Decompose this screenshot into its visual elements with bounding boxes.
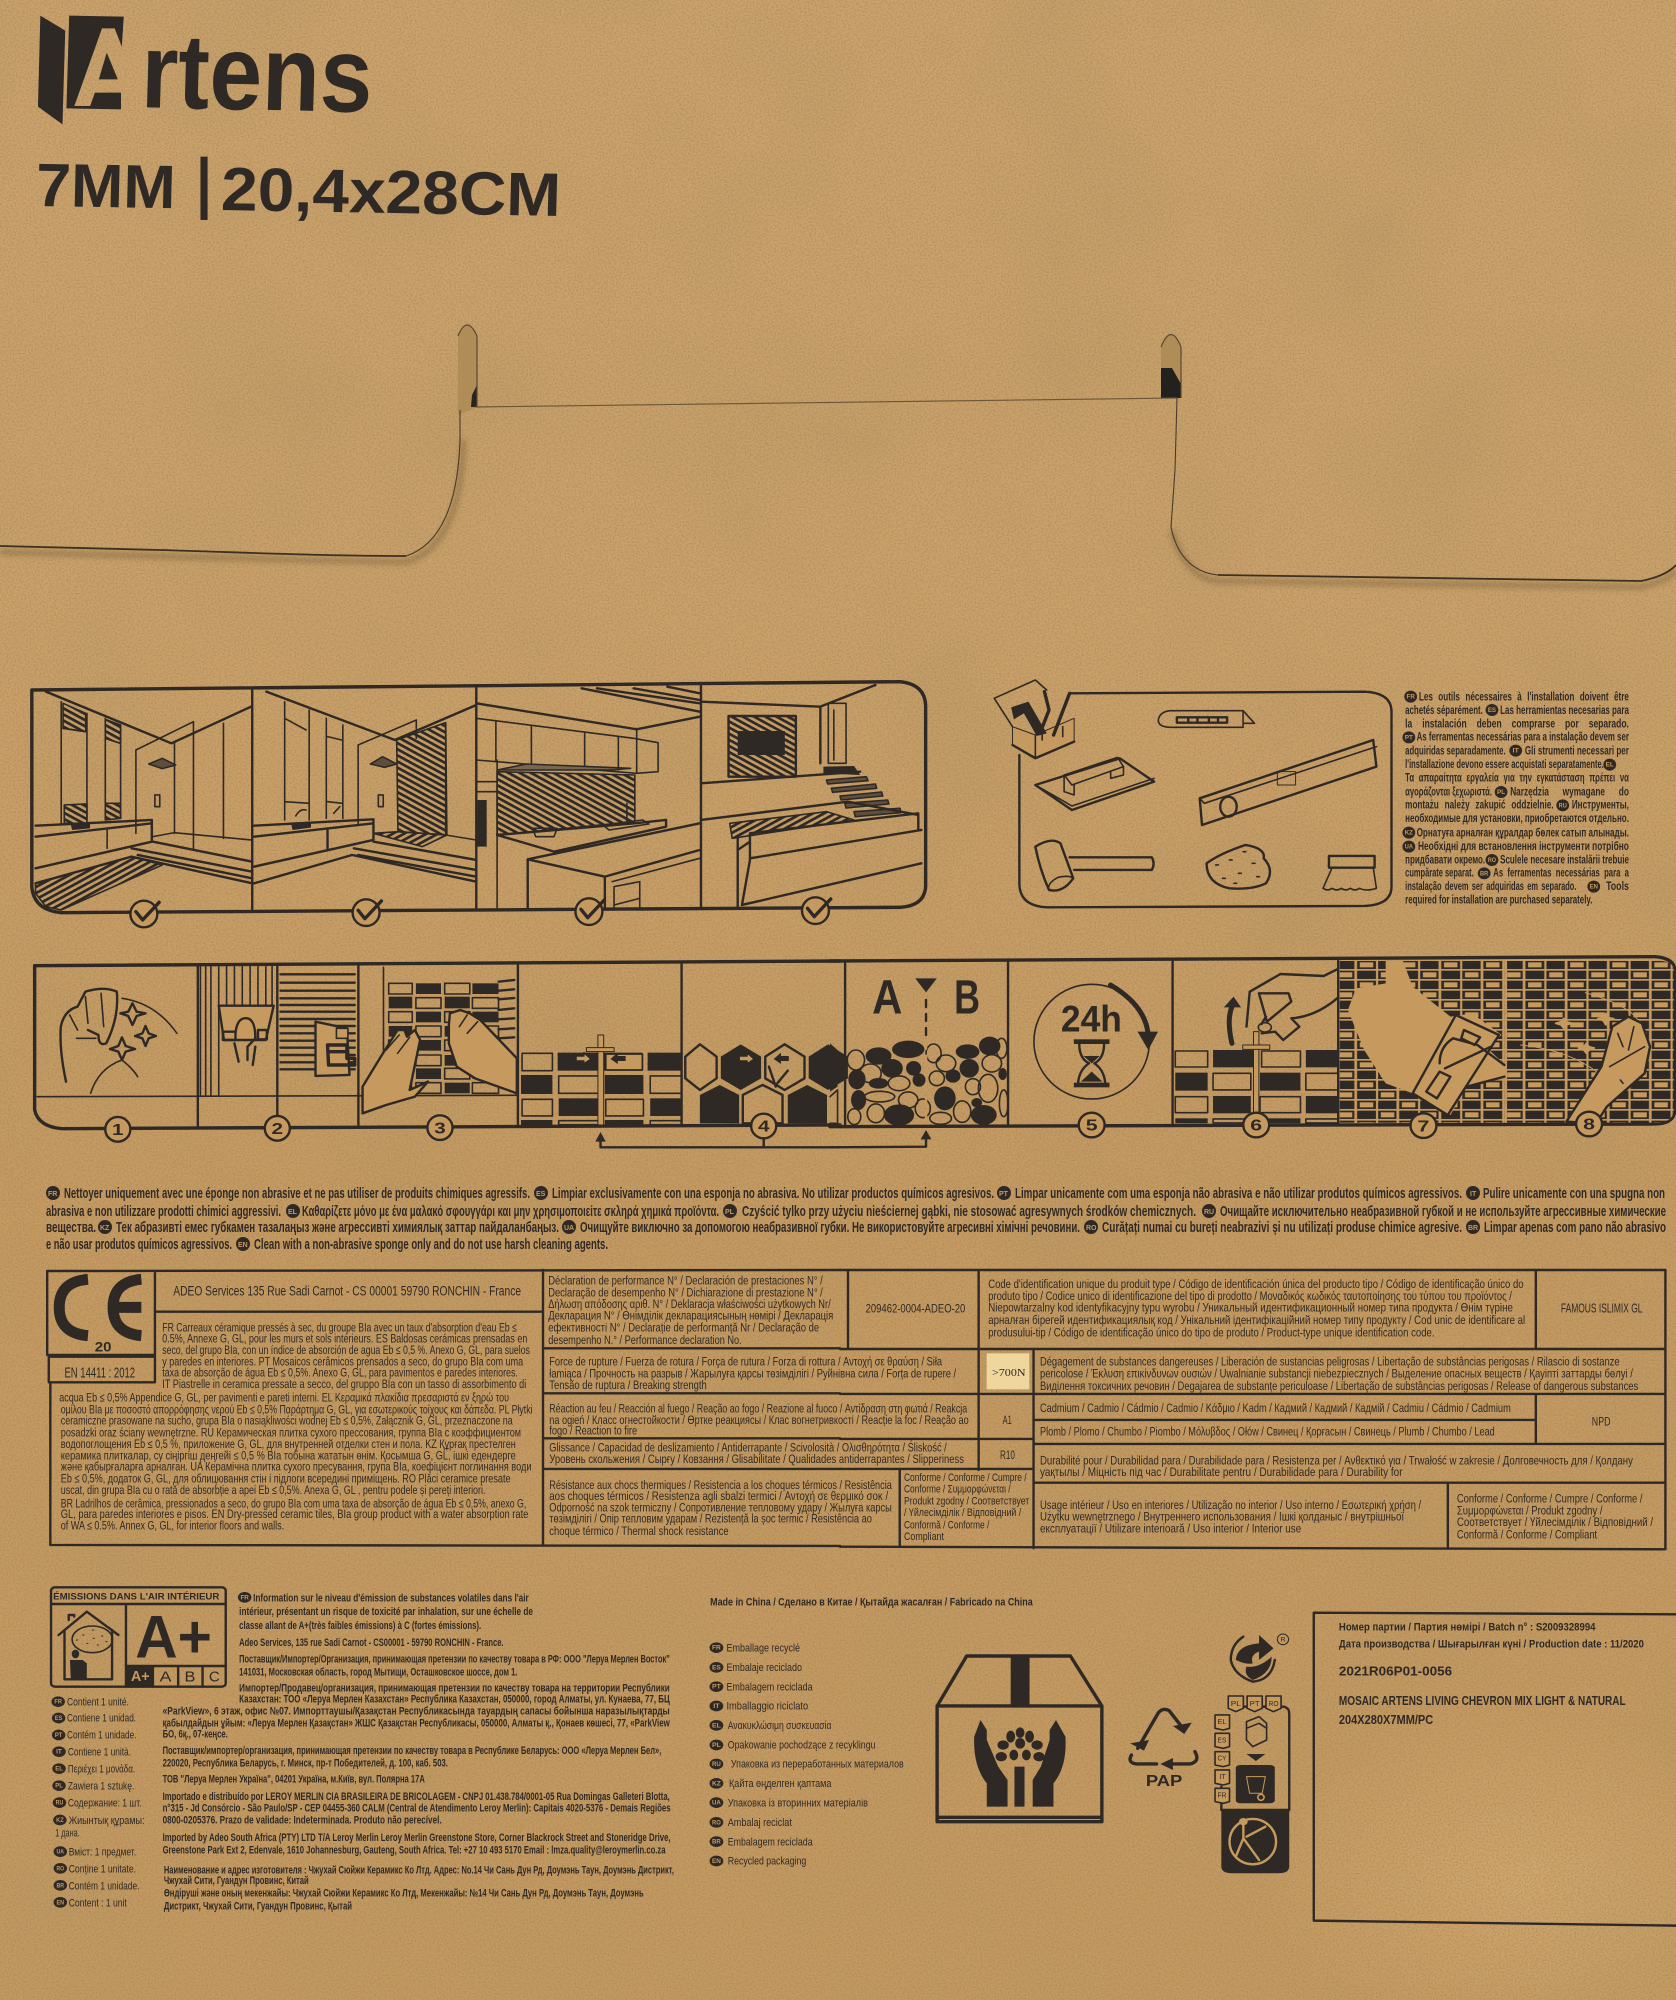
emissions explanation and importers: Казахстан: ТОО «Леруа Мерлен Казахстан» Республика Казахстан, 050000, город Алматы, ул. Кунаева, 77, БЦ [239, 1693, 670, 1705]
label tabs: languages: PT [1250, 1700, 1260, 1708]
panel: installation steps 1-4 [35, 961, 848, 1147]
package contents list: EN [57, 1900, 64, 1906]
package contents list: Contient 1 unité. [67, 1695, 129, 1708]
emissions label [51, 1587, 226, 1687]
tools purchase note: UA [1405, 843, 1413, 850]
tools purchase note: cumpărate separat. [1405, 867, 1474, 880]
icon: letter A block [66, 16, 124, 109]
panel: CE declaration table, left: GL, para paredes interiores e pisos. EN Dry-pressed ceramic tiles, BIa group product with a water absorption rate [61, 1508, 528, 1521]
cleaning instructions text: Nettoyer uniquement avec une éponge non abrasive et ne pas utiliser de produits chimiques agressifs. [64, 1186, 530, 1202]
recycled packaging list: BR [712, 1838, 721, 1845]
step dividers [845, 961, 1338, 1125]
step 3: lay mosaic [363, 967, 517, 1113]
emissions explanation and importers: Information sur le niveau d'émission de substances volatiles dans l'air [253, 1592, 529, 1604]
icon: house with person [59, 1612, 118, 1679]
tools purchase note: Tools [1606, 880, 1629, 893]
A and B stone layout: A [872, 969, 902, 1024]
package contents list: FR [54, 1699, 62, 1705]
emissions explanation and importers: Чжухай Сити, Гуандун Провинс, Китай [164, 1874, 309, 1887]
package contents list: Content : 1 unit [69, 1896, 127, 1909]
package contents list: ES [55, 1716, 63, 1722]
right tab edge [1171, 398, 1218, 575]
wordmark: rtens [140, 11, 374, 135]
panel: CE declaration table, left [47, 1270, 969, 1546]
step 5: wait 24h [1034, 984, 1158, 1099]
package contents list: Вміст: 1 предмет. [69, 1845, 136, 1858]
CE mark [59, 1279, 141, 1355]
panel: room use illustrations [32, 682, 926, 927]
icon: mallet [1035, 841, 1154, 891]
step number 1 [105, 1117, 130, 1142]
breaking strength value: >700N [992, 1367, 1026, 1378]
panel: bottom centre and right: Упаковка из переработанных материалов [731, 1758, 904, 1770]
label tabs: languages: ES [1218, 1736, 1226, 1744]
emissions explanation and importers: Поставщик/импортер/организация, принимающая претензии по качеству товара в Республике Беларусь: ООО «Леруа Мерлен Бел», [163, 1744, 661, 1757]
package contents list: Contiene 1 unità. [68, 1745, 131, 1758]
cleaning instructions text: EL [288, 1209, 298, 1216]
performance rows text: Declaração de desempenho N° / Dichiarazione di prestazione N° / [548, 1287, 823, 1300]
durability text: експлуатації / Utilizare interioară / Uso interior / Interior use [1040, 1523, 1301, 1535]
emissions explanation and importers [163, 1592, 674, 1912]
panel: tools needed [994, 680, 1629, 907]
panel: CE declaration table, left: ομίλου BIa με ποσοστό απορρόφησης νερού Eb ≤ 0,5% Παράρτημα G, GL, για εσωτερικούς τοίχους και δάπεδα. PL Płytki [61, 1403, 533, 1416]
recycled packaging list: Emballage recyclé [726, 1642, 800, 1654]
cleaning instructions text: вещества. [46, 1220, 96, 1236]
panel: CE declaration table, left: EN 14411 : 2012 [64, 1365, 135, 1381]
recycled packaging list: Ambalaj reciclat [728, 1817, 792, 1829]
cleaning instructions text: RU [1204, 1209, 1214, 1216]
emissions explanation and importers: қабылдайдын ұйым: «Леруа Мерлен Қазақстан» ЖШС Қазақстан Республикасы, 050000, Алматы қ., Қонаев көшесі, 77, «ParkView [163, 1717, 670, 1729]
label tabs: languages: PL [1231, 1700, 1241, 1708]
performance rows text: Δήλωση απόδοσης αριθ. N° / Deklaracja właściwości użytkowych Nr/ [548, 1298, 831, 1311]
performance rows text: Glissance / Capacidad de deslizamiento / Antiderrapante / Scivolosità / Ολισθηρότητα / Śliskość / [549, 1440, 947, 1454]
panel: CE declaration table, right [840, 1270, 1665, 1549]
recycled packaging list: UA [712, 1799, 721, 1806]
icon: green dot: R [1280, 1636, 1285, 1644]
step number 6 [1243, 1113, 1269, 1137]
performance rows text: Déclaration de performance N° / Declaración de prestaciones N° / [548, 1275, 823, 1288]
tools purchase note: ES [1488, 706, 1497, 714]
panel: CE declaration table, left: BR Ladrilhos de cerâmica, pressionados a seco, do grupo BIa com uma taxa de absorção de água Eb ≤ 0,5%, anexo G, [61, 1497, 526, 1510]
cleaning instructions text: Limpar unicamente com uma esponja não abrasiva e não utilizar produtos químicos agressivos. [1015, 1186, 1462, 1202]
emissions explanation and importers: 141031, Московская область, город Мытищи, Осташковское шоссе, дом 1. [239, 1666, 517, 1678]
package contents list: 1 дана. [55, 1826, 80, 1839]
step number 3 [427, 1115, 453, 1140]
dimensions: 20,4x28CM [220, 155, 562, 230]
package contents list [51, 1695, 144, 1909]
A and B stone layout [847, 969, 1008, 1126]
emissions label: C [209, 1668, 220, 1685]
package contents list: RU [56, 1800, 63, 1806]
emissions explanation and importers: ТОВ "Леруа Мерлен Україна", 04201 Україна, м.Київ, вул. Полярна 17А [163, 1773, 425, 1785]
product description: Eb ≤ 0,5%, додаток G, GL, для облицювання стін і підлоги всередині приміщень. RO Plăci ceramice presate [61, 1472, 511, 1485]
cleaning instructions text: Clean with a non-abrasive sponge only and do not use harsh cleaning agents. [254, 1237, 608, 1253]
step number 5 [1079, 1113, 1105, 1137]
cleaning instructions text: PT [999, 1191, 1009, 1198]
dangerous substances text [1040, 1356, 1638, 1439]
check marks [130, 897, 831, 927]
conformity text centre [904, 1472, 1030, 1543]
cleaning instructions text: Czyścić tylko przy użyciu nieściernej gąbki, nie stosować agresywnych środków chemicznych. [742, 1204, 1196, 1220]
icon: spirit level [1200, 740, 1376, 825]
step number 4 [751, 1114, 776, 1138]
step number 4: 4 [758, 1118, 770, 1135]
panel: CE declaration table, left: ADEO Services 135 Rue Sadi Carnot - CS 00001 59790 RONCHIN - France [173, 1283, 521, 1299]
label tabs: languages: EL [1218, 1718, 1226, 1726]
emissions explanation and importers: FR [240, 1595, 249, 1601]
package contents list: Conține 1 unitate. [69, 1862, 136, 1875]
product description: acqua Eb ≤ 0,5% Appendice G, GL, per pavimenti e pareti interni. EL Κεραμικά πλακίδια πρεσαριστά εν ξηρώ του [59, 1391, 509, 1404]
step number 2: 2 [272, 1120, 283, 1138]
product description: керамика плиткалар, су сіңіргіш деңгейі ≤ 0,5 % BIa тобына жататын өнім. Қосымша G, GL, ішкі едендерге [61, 1450, 516, 1463]
icon: sponge [1207, 845, 1270, 889]
package contents list: RO [57, 1866, 65, 1872]
step number 1: 1 [112, 1121, 124, 1139]
package contents list: Contém 1 unidade. [67, 1728, 136, 1741]
panel: CE declaration table, right: NPD [1592, 1416, 1610, 1429]
panel: CE declaration table, left: seco, del grupo BIa, con un índice de absorción de agua Eb ≤ 0,5 %. Anexo G, GL, para suelos [162, 1344, 530, 1357]
recycled packaging list: KZ [712, 1780, 721, 1787]
room dividers [252, 686, 701, 912]
recycled packaging list: Embalagem reciclada [726, 1681, 813, 1693]
cleaning instructions text: Καθαρίζετε μόνο με ένα μαλακό σφουγγάρι και μην χρησιμοποιείτε σκληρά χημικά προϊόντα. [302, 1204, 719, 1220]
step 7: grout with float [1340, 961, 1505, 1123]
tools purchase note: RO [1488, 856, 1496, 864]
performance rows text: Résistance aux chocs thermiques / Resistencia a los choques térmicos / Resistência [549, 1479, 892, 1492]
cleaning instructions text: PL [725, 1209, 735, 1216]
panel: CE declaration table, right: R10 [1000, 1449, 1015, 1462]
cleaning instructions text: Тек абразивті емес губкамен тазалаңыз және агрессивті химиялық заттар пайдаланбаңыз. [116, 1220, 559, 1236]
tools purchase note: PL [1497, 788, 1505, 796]
durability text [1040, 1455, 1633, 1535]
package contents list: PL [55, 1783, 63, 1789]
separator [200, 157, 208, 220]
recycled packaging list: PT [712, 1683, 721, 1690]
performance rows text: łamiąca / Прочность на разрыв / Жарылуға қарсы төзімділігі / Руйнівна сила / Forța de rupere / [549, 1367, 957, 1380]
tools purchase note: FR [1407, 693, 1415, 700]
product type code text [988, 1278, 1525, 1339]
batch label box: 204X280X7MM/PC [1339, 1713, 1433, 1727]
step number 7 [1411, 1113, 1436, 1138]
conformity text centre: Conforme / Συμμορφώνεται / [904, 1484, 1011, 1496]
step number 7: 7 [1418, 1117, 1429, 1135]
hex tile remainder [830, 1043, 838, 1123]
package contents list: UA [57, 1849, 64, 1855]
cleaning instructions text: BR [1468, 1225, 1478, 1232]
performance rows text [548, 1275, 969, 1538]
performance rows text: choque térmico / Thermal shock resistance [549, 1525, 729, 1538]
icon: recycled cardboard box [937, 1656, 1102, 1822]
step number 5: 5 [1086, 1117, 1098, 1134]
panel: bottom centre and right: Made in China / Сделано в Китае / Қытайда жасалған / Fabricado na China [710, 1596, 1033, 1608]
recycled packaging list: RO [712, 1819, 721, 1826]
performance rows text: Декларация N° / Өнімділік декларациясының нөмірі / Декларація [548, 1310, 833, 1323]
performance rows text: fogo / Reaction to fire [549, 1424, 637, 1437]
panel: CE declaration table, right: 209462-0004-ADEO-20 [866, 1303, 965, 1315]
crease [475, 398, 1177, 407]
cleaning instructions text: FR [48, 1191, 57, 1198]
tools purchase note: RU [1559, 801, 1567, 809]
emissions explanation and importers: 220020, Республика Беларусь, г. Минск, пр-т Победителей, д. 100, каб. 503. [163, 1757, 448, 1769]
text: Réaction au feu / Reacción al fuego / Reação ao fogo / Reazione al fuoco / Αντίδραση στη φωτιά / Reakcja [549, 1402, 967, 1415]
cleaning instructions text: Limpiar exclusivamente con una esponja no abrasiva. No utilizar productos químicos agresivos. [552, 1186, 994, 1202]
emissions explanation and importers: Дистрикт, Чжухай Сити, Гуандун Провинс, Қытай [164, 1900, 352, 1912]
step 2: spread adhesive [200, 967, 355, 1095]
panel: bottom centre and right [709, 1596, 1676, 1926]
cleaning instructions text: RO [1086, 1225, 1097, 1232]
recycled packaging list: ES [712, 1664, 721, 1671]
emissions label: A+ [135, 1604, 212, 1670]
batch label box [1314, 1613, 1676, 1926]
product size heading [35, 151, 562, 230]
conformity text centre: Produkt zgodny / Соответствует [904, 1495, 1030, 1507]
step 8: wipe clean [1507, 961, 1674, 1123]
emissions label: B [184, 1668, 195, 1685]
icon: letter A counter [99, 53, 118, 79]
recycled packaging list: IT [713, 1703, 720, 1709]
tools purchase note: PT [1405, 733, 1413, 741]
package contents list: Содержание: 1 шт. [68, 1796, 142, 1809]
emissions explanation and importers: БО, 6қ., 07-кеңсе. [163, 1728, 228, 1740]
emissions label: A+ [131, 1668, 150, 1685]
panel: CE declaration table, left: IT Piastrelle in ceramica pressate a secco, del gruppo BIa con un tasso di assorbimento di [162, 1378, 526, 1391]
panel: installation steps 5-8 [830, 957, 1675, 1147]
emissions explanation and importers: Imported by Adeo South Africa (PTY) LTD T/A Leroy Merlin Leroy Merlin Greenstone Store, Corner Blackrock Street and Stoneridge Drive, [163, 1831, 671, 1844]
tools purchase note: BR [1480, 869, 1488, 877]
room 3: kitchen [476, 687, 700, 908]
conformity text centre: / Үйлесімділік / Відповідний / [904, 1507, 1021, 1519]
room 4: living room [701, 685, 921, 907]
performance rows text: Уровень скольжения / Сырғу / Ковзання / Glisabilitate / Qualidades antiderrapantes / Slipperiness [549, 1453, 964, 1466]
recycled packaging list: FR [712, 1644, 721, 1651]
label tabs: languages: IT [1219, 1773, 1226, 1781]
emissions label: ÉMISSIONS DANS L'AIR INTÉRIEUR [53, 1591, 220, 1602]
cleaning instructions text: ES [536, 1191, 546, 1198]
emissions explanation and importers: Adeo Services, 135 rue Sadi Carnot - CS00001 - 59790 RONCHIN - France. [239, 1636, 504, 1649]
CE mark: 20 [95, 1339, 112, 1355]
emissions explanation and importers: n°315 - Jd Consórcio - São Paulo/SP - CEP 04455-360 CALM (Central de Atendimento Leroy Merlin): Capitais 4020-5376 - Demais Regiões [163, 1802, 671, 1814]
icon: knife [1158, 711, 1255, 727]
emissions explanation and importers: Өндіруші және оның мекенжайы: Чжухай Сюйжи Керамикс Ко Лтд, Мекенжайы: №14 Чи Сань Дун Рд, Доумэнь Таун, Доумэнь [164, 1887, 644, 1899]
left slot [458, 325, 477, 415]
cleaning instructions text: abrasiva e non utilizzare prodotti chimici aggressivi. [46, 1204, 281, 1220]
emissions label: A [160, 1668, 172, 1685]
table lines left [47, 1270, 840, 1546]
tools purchase note: EL [1606, 761, 1614, 768]
tools outline [1019, 692, 1391, 907]
recycled packaging list: Embalagem reciclada [728, 1836, 813, 1848]
package contents list: Περιέχει 1 μονάδα. [68, 1762, 135, 1775]
performance rows text: desempenho N.° / Performance declaration No. [548, 1334, 742, 1347]
recycled packaging list: Opakowanie pochodzące z recyklingu [728, 1739, 875, 1751]
tools purchase note: IT [1512, 747, 1519, 754]
conformity text centre: Compliant [904, 1531, 944, 1543]
panel: CE declaration table, left: posadzki oraz ściany wewnętrzne. RU Керамическая плитка сухого прессования, группа BIa с коэффициентом [61, 1426, 521, 1439]
recycled packaging list: Қайта өңделген қаптама [729, 1778, 832, 1790]
emissions explanation and importers: Greenstone Park Ext 2, Edenvale, 1610 Johannesburg, Gauteng, South Africa. Tel: +27 10 493 5170 Email : lmza.quality@leroymerlin.co.za [163, 1844, 666, 1856]
package contents list: BR [57, 1883, 64, 1889]
right slot [1161, 334, 1181, 398]
performance rows text: Tensão de ruptura / Breaking strength [549, 1379, 707, 1392]
icon: float trowel [1035, 757, 1154, 810]
emissions explanation and importers: Поставщик/Импортер/Организация, принимающая претензии по качеству товара в РФ: ООО "Леруа Мерлен Восток" [239, 1653, 670, 1665]
performance rows text: ефективності N° / Declarație de performanță Nr / Declaração de [548, 1322, 819, 1335]
tools purchase note: придбавати окремо. [1405, 853, 1485, 867]
performance rows text: төзімділігі / Опір тепловим ударам / Rezistență la șoc termic / Resistência ao [549, 1513, 872, 1526]
cleaning instructions text [46, 1186, 1666, 1253]
product description [59, 1322, 533, 1532]
cleaning instructions text: IT [1470, 1191, 1477, 1198]
recycled packaging list: Imballaggio riciclato [726, 1700, 808, 1712]
tools purchase note: adquiridas separadamente. [1405, 745, 1506, 758]
emissions explanation and importers: «ParkView», 6 этаж, офис №07. Импорттаушы/Қазақстан Республикасында тауардың сапасы бойынша наразылықтарды [163, 1705, 670, 1717]
package contents list: Contiene 1 unidad. [67, 1711, 136, 1724]
emissions explanation and importers: Importado e distribuído por LEROY MERLIN CIA BRASILEIRA DE BRICOLAGEM - CNPJ 01.438.784/0001-05 Rua Domingas Galleteri Blotta, [163, 1790, 670, 1803]
panel: CE declaration table, left: FR Carreaux céramique pressés à sec, du groupe BIa avec un taux d'absorption d'eau Eb ≤ [162, 1322, 517, 1335]
step 6: remove spacer [1175, 969, 1338, 1123]
step number 3: 3 [434, 1120, 446, 1137]
icon: notched trowel [1323, 856, 1376, 890]
conformity text right [1457, 1493, 1653, 1541]
package contents list: PT [55, 1733, 63, 1739]
recycled packaging list: Ανακυκλώσιμη συσκευασία [728, 1720, 831, 1732]
label tabs: languages: RO [1268, 1700, 1279, 1708]
icon: Triman sorting label [1221, 1707, 1289, 1873]
step number 6: 6 [1250, 1117, 1262, 1134]
room 2: bathroom with tiled shower [254, 692, 476, 883]
box flap cut lines [0, 325, 1676, 587]
cleaning instructions text: KZ [100, 1225, 110, 1232]
icon: door [38, 16, 65, 124]
product description: of WA ≤ 0.5%. Annex G, GL, for interior floors and walls. [61, 1519, 284, 1532]
text: na ogień / Класс огнестойкости / Өртке реакциясы / Клас вогнетривкості / Reacție la foc / Reação ao [549, 1414, 969, 1427]
cleaning instructions text: EN [238, 1242, 248, 1249]
package contents list: IT [56, 1749, 63, 1755]
connector arrow to stones [830, 1130, 931, 1147]
step number 2 [265, 1116, 290, 1141]
label tabs: languages [1215, 1696, 1281, 1803]
emissions explanation and importers: classe allant de A+(très faibles émissions) à C (fortes émissions). [239, 1619, 481, 1632]
room 1: bathroom [36, 692, 252, 910]
product description: uscat, din grupa BIa cu o rată de absorbție a apei Eb ≤ 0,5%. Anexa G, GL , pentru podele și pereți interiori. [61, 1484, 485, 1497]
icon: hourglass [1074, 1039, 1109, 1087]
panel: CE declaration table, left: ceramiczne prasowane na sucho, grupa BIa o nasiąkliwości wodnej Eb ≤ 0,5%, Załącznik G, GL, przeznaczone na [61, 1415, 513, 1428]
recycled packaging list: EN [712, 1858, 721, 1864]
package contents list: Contém 1 unidade. [69, 1879, 139, 1892]
performance rows text: Force de rupture / Fuerza de rotura / Força de rutura / Forza di rottura / Αντοχή σε θραύση / Siła [549, 1356, 942, 1369]
panel outline [32, 682, 926, 913]
label tabs: languages: CY [1218, 1755, 1227, 1763]
icon: PAP recycling triangle [1130, 1709, 1197, 1789]
panel: bottom left legal information [51, 1587, 674, 1912]
step dividers [198, 964, 682, 1127]
label tabs: languages: FR [1218, 1791, 1226, 1799]
highlighted value cell [987, 1353, 1029, 1389]
recycled packaging list: RU [712, 1761, 721, 1767]
thickness: 7MM [35, 151, 176, 222]
left tab edge [0, 546, 406, 556]
A and B stone layout: B [954, 969, 980, 1024]
panel: CE declaration table, left: taxa de absorção de água Eb ≤ 0,5%. Anexo G, GL, para pavimentos e paredes interiores. [162, 1367, 518, 1380]
emissions explanation and importers: intérieur, présentant un risque de toxicité par inhalation, sur une échelle de [239, 1605, 533, 1618]
table lines right [840, 1270, 1665, 1549]
recycled packaging list: PL [712, 1742, 721, 1748]
strip outline right [830, 957, 1675, 1127]
icon: green dot [1231, 1634, 1289, 1682]
icon: toolbox [994, 680, 1074, 758]
recycled packaging list: Embalaje reciclado [726, 1662, 802, 1674]
conformity text centre: Conforme / Conforme / Cumpre / [904, 1472, 1027, 1484]
recycled packaging list: Recycled packaging [728, 1855, 806, 1867]
tools purchase note: KZ [1405, 829, 1413, 836]
step number 8: 8 [1583, 1116, 1595, 1133]
performance rows text: Odporność na szok termiczny / Сопротивление тепловому удару / Жылуға карсы [549, 1501, 892, 1514]
conformity text centre: Conformă / Conforme / [904, 1519, 989, 1531]
emissions explanation and importers: Импортер/Продавец/организация, принимающая претензии по качеству товара на территории Республики [239, 1682, 670, 1694]
package contents list: KZ [56, 1818, 64, 1824]
tools purchase note: achetés séparément. [1405, 704, 1483, 717]
step number 8 [1576, 1112, 1602, 1136]
step 4: place spacers on brick tiles [521, 1035, 848, 1125]
performance rows text: aos choques térmicos / Resistenza agli sbalzi termici / Αντοχή σε θερμικό σοκ / [549, 1490, 889, 1503]
step 5: wait 24h: 24h [1061, 998, 1122, 1040]
panel: CE declaration table, left: және қабырғаларға арналған. UA Керамічна плитка сухого пресування, група BIa, коефіцієнт поглинання води [61, 1461, 531, 1474]
step 1: wipe with sponge [60, 989, 177, 1093]
emissions explanation and importers: 0800-0205376. Prazo de validade: Indeterminada. Produto não perecível. [163, 1814, 442, 1826]
recycled packaging list: Упаковка із вторинних матеріалів [728, 1797, 868, 1809]
package contents list: Zawiera 1 sztukę. [68, 1779, 134, 1792]
recycled packaging list [709, 1642, 904, 1867]
panel: CE declaration table, left: водопоглощения Eb ≤ 0,5 %, приложение G, GL, для внутренней отделки стен и пола. KZ Құрғақ престелген [61, 1438, 516, 1451]
panel: CE declaration table, left: 0.5%, Annexe G, GL, pour les murs et sols intérieurs. ES Baldosas cerámicas prensadas en [162, 1332, 527, 1345]
panel: CE declaration table, right: A1 [1003, 1414, 1012, 1427]
tools purchase note: αγοράζονται ξεχωριστά. [1405, 785, 1492, 799]
panel: CE declaration table, left: y paredes en interiores. PT Mosaicos cerâmicos prensados a seco, do grupo BIa com uma [162, 1356, 523, 1369]
package contents list: Жиынтық құрамы: [69, 1813, 144, 1827]
brand logo [38, 11, 374, 135]
cleaning instructions text: Очищуйте виключно за допомогою неабразивної губки. Не використовуйте агресивні хімічні речовини. [580, 1220, 1080, 1236]
cleaning instructions text: e não usar produtos químicos agressivos. [46, 1237, 232, 1253]
cleaning instructions text: UA [564, 1225, 574, 1232]
icon: PAP recycling triangle: PAP [1146, 1772, 1182, 1789]
tools purchase note: EN [1590, 883, 1598, 890]
cleaning instructions text: Curățați numai cu bureți neabrazivi și nu utilizați produse chimice agresive. [1102, 1220, 1462, 1236]
connector arrows [595, 1132, 840, 1147]
package contents list: EL [55, 1766, 63, 1772]
recycled packaging list: EL [712, 1722, 721, 1729]
tools purchase note [1402, 691, 1629, 907]
strip outline left [35, 961, 840, 1129]
emissions explanation and importers: Наименование и адрес изготовителя : Чжухай Сюйжи Керамикс Ко Лтд. Адрес: No.14 Чи Сань Дун Рд, Доумэнь Таун, Доумэнь Дистрикт, [164, 1864, 674, 1876]
batch label box: 2021R06P01-0056 [1339, 1664, 1452, 1679]
